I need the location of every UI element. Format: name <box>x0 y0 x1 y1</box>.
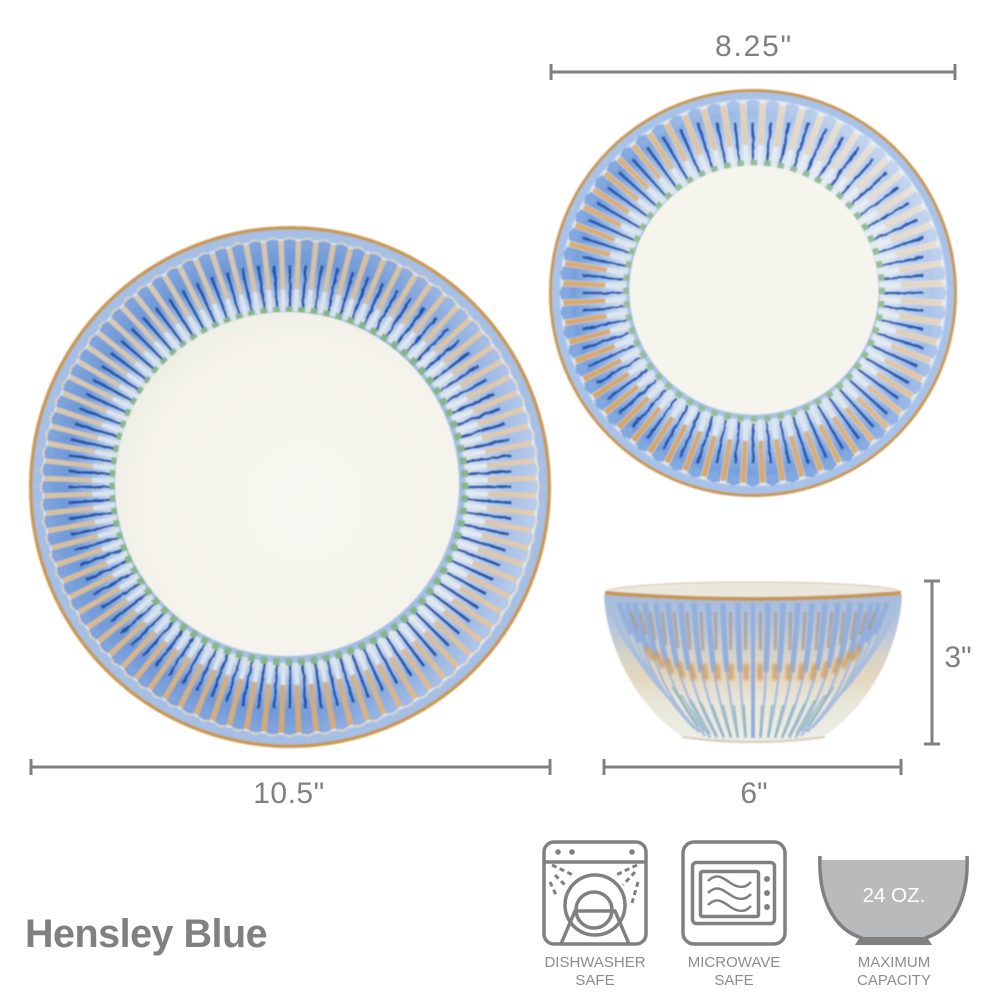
tan grooves <box>584 124 922 462</box>
dimension label: 3" <box>944 641 972 674</box>
blue flutes <box>78 275 502 699</box>
green inner edge <box>626 163 882 419</box>
flute rounded tops <box>565 105 941 481</box>
capacity foot <box>855 937 932 945</box>
dimension label: 10.5" <box>253 777 325 810</box>
dishwasher label: SAFE <box>575 972 615 989</box>
dimension: dinner plate width <box>31 759 550 810</box>
salad plate <box>549 89 957 497</box>
dimension: bowl width <box>604 759 901 810</box>
pale flute base <box>78 275 502 699</box>
microwave label: SAFE <box>714 972 754 989</box>
bowl interior <box>606 582 900 602</box>
icon: dishwasher safe <box>544 842 646 989</box>
large dinner plate <box>29 226 551 748</box>
bowl foot <box>682 737 825 742</box>
dark blue flute centres <box>89 286 491 688</box>
dimension line <box>604 759 901 775</box>
microwave buttons <box>764 876 770 910</box>
tan flute outlines <box>46 243 534 731</box>
capacity outline <box>820 856 967 938</box>
plate rim <box>549 89 957 497</box>
blue flutes <box>593 133 913 453</box>
icon: microwave safe <box>683 842 785 989</box>
blue glaze band <box>32 230 548 744</box>
dark blue flute centres <box>598 138 908 448</box>
dimension line <box>551 64 955 80</box>
product name: Hensley Blue <box>25 912 267 956</box>
plate well <box>630 166 878 414</box>
pale flute base <box>593 133 913 453</box>
left half ribs <box>609 603 746 738</box>
blue glaze band <box>552 92 954 494</box>
right side glaze wash <box>78 275 502 699</box>
dimension: bowl height <box>924 581 972 744</box>
microwave label: MICROWAVE <box>688 954 780 971</box>
dishwasher buttons <box>555 849 635 855</box>
green inner edge <box>113 310 465 662</box>
capacity label: CAPACITY <box>857 972 931 989</box>
upper right glaze wash <box>593 133 913 453</box>
dimension: salad plate width <box>551 30 955 80</box>
right half ribs <box>760 603 897 738</box>
capacity value: 24 OZ. <box>863 884 925 907</box>
bowl ribs <box>609 603 897 738</box>
dimension line <box>31 759 550 775</box>
dimension line <box>924 581 940 744</box>
centre rib <box>751 603 755 738</box>
microwave outline <box>683 842 785 944</box>
dishwasher label: DISHWASHER <box>544 954 646 971</box>
dimension label: 6" <box>740 777 768 810</box>
flute rounded tops <box>47 244 533 730</box>
icon: bowl capacity <box>820 856 967 989</box>
capacity label: MAXIMUM <box>858 954 930 971</box>
tan grooves <box>68 265 512 709</box>
dishwasher outline <box>544 842 646 944</box>
bowl body <box>604 595 902 743</box>
plate well <box>115 312 459 656</box>
dimension label: 8.25" <box>715 30 793 63</box>
bowl <box>604 582 902 743</box>
plate rim <box>29 226 551 748</box>
bowl rim <box>605 593 901 599</box>
capacity fill <box>820 860 967 945</box>
